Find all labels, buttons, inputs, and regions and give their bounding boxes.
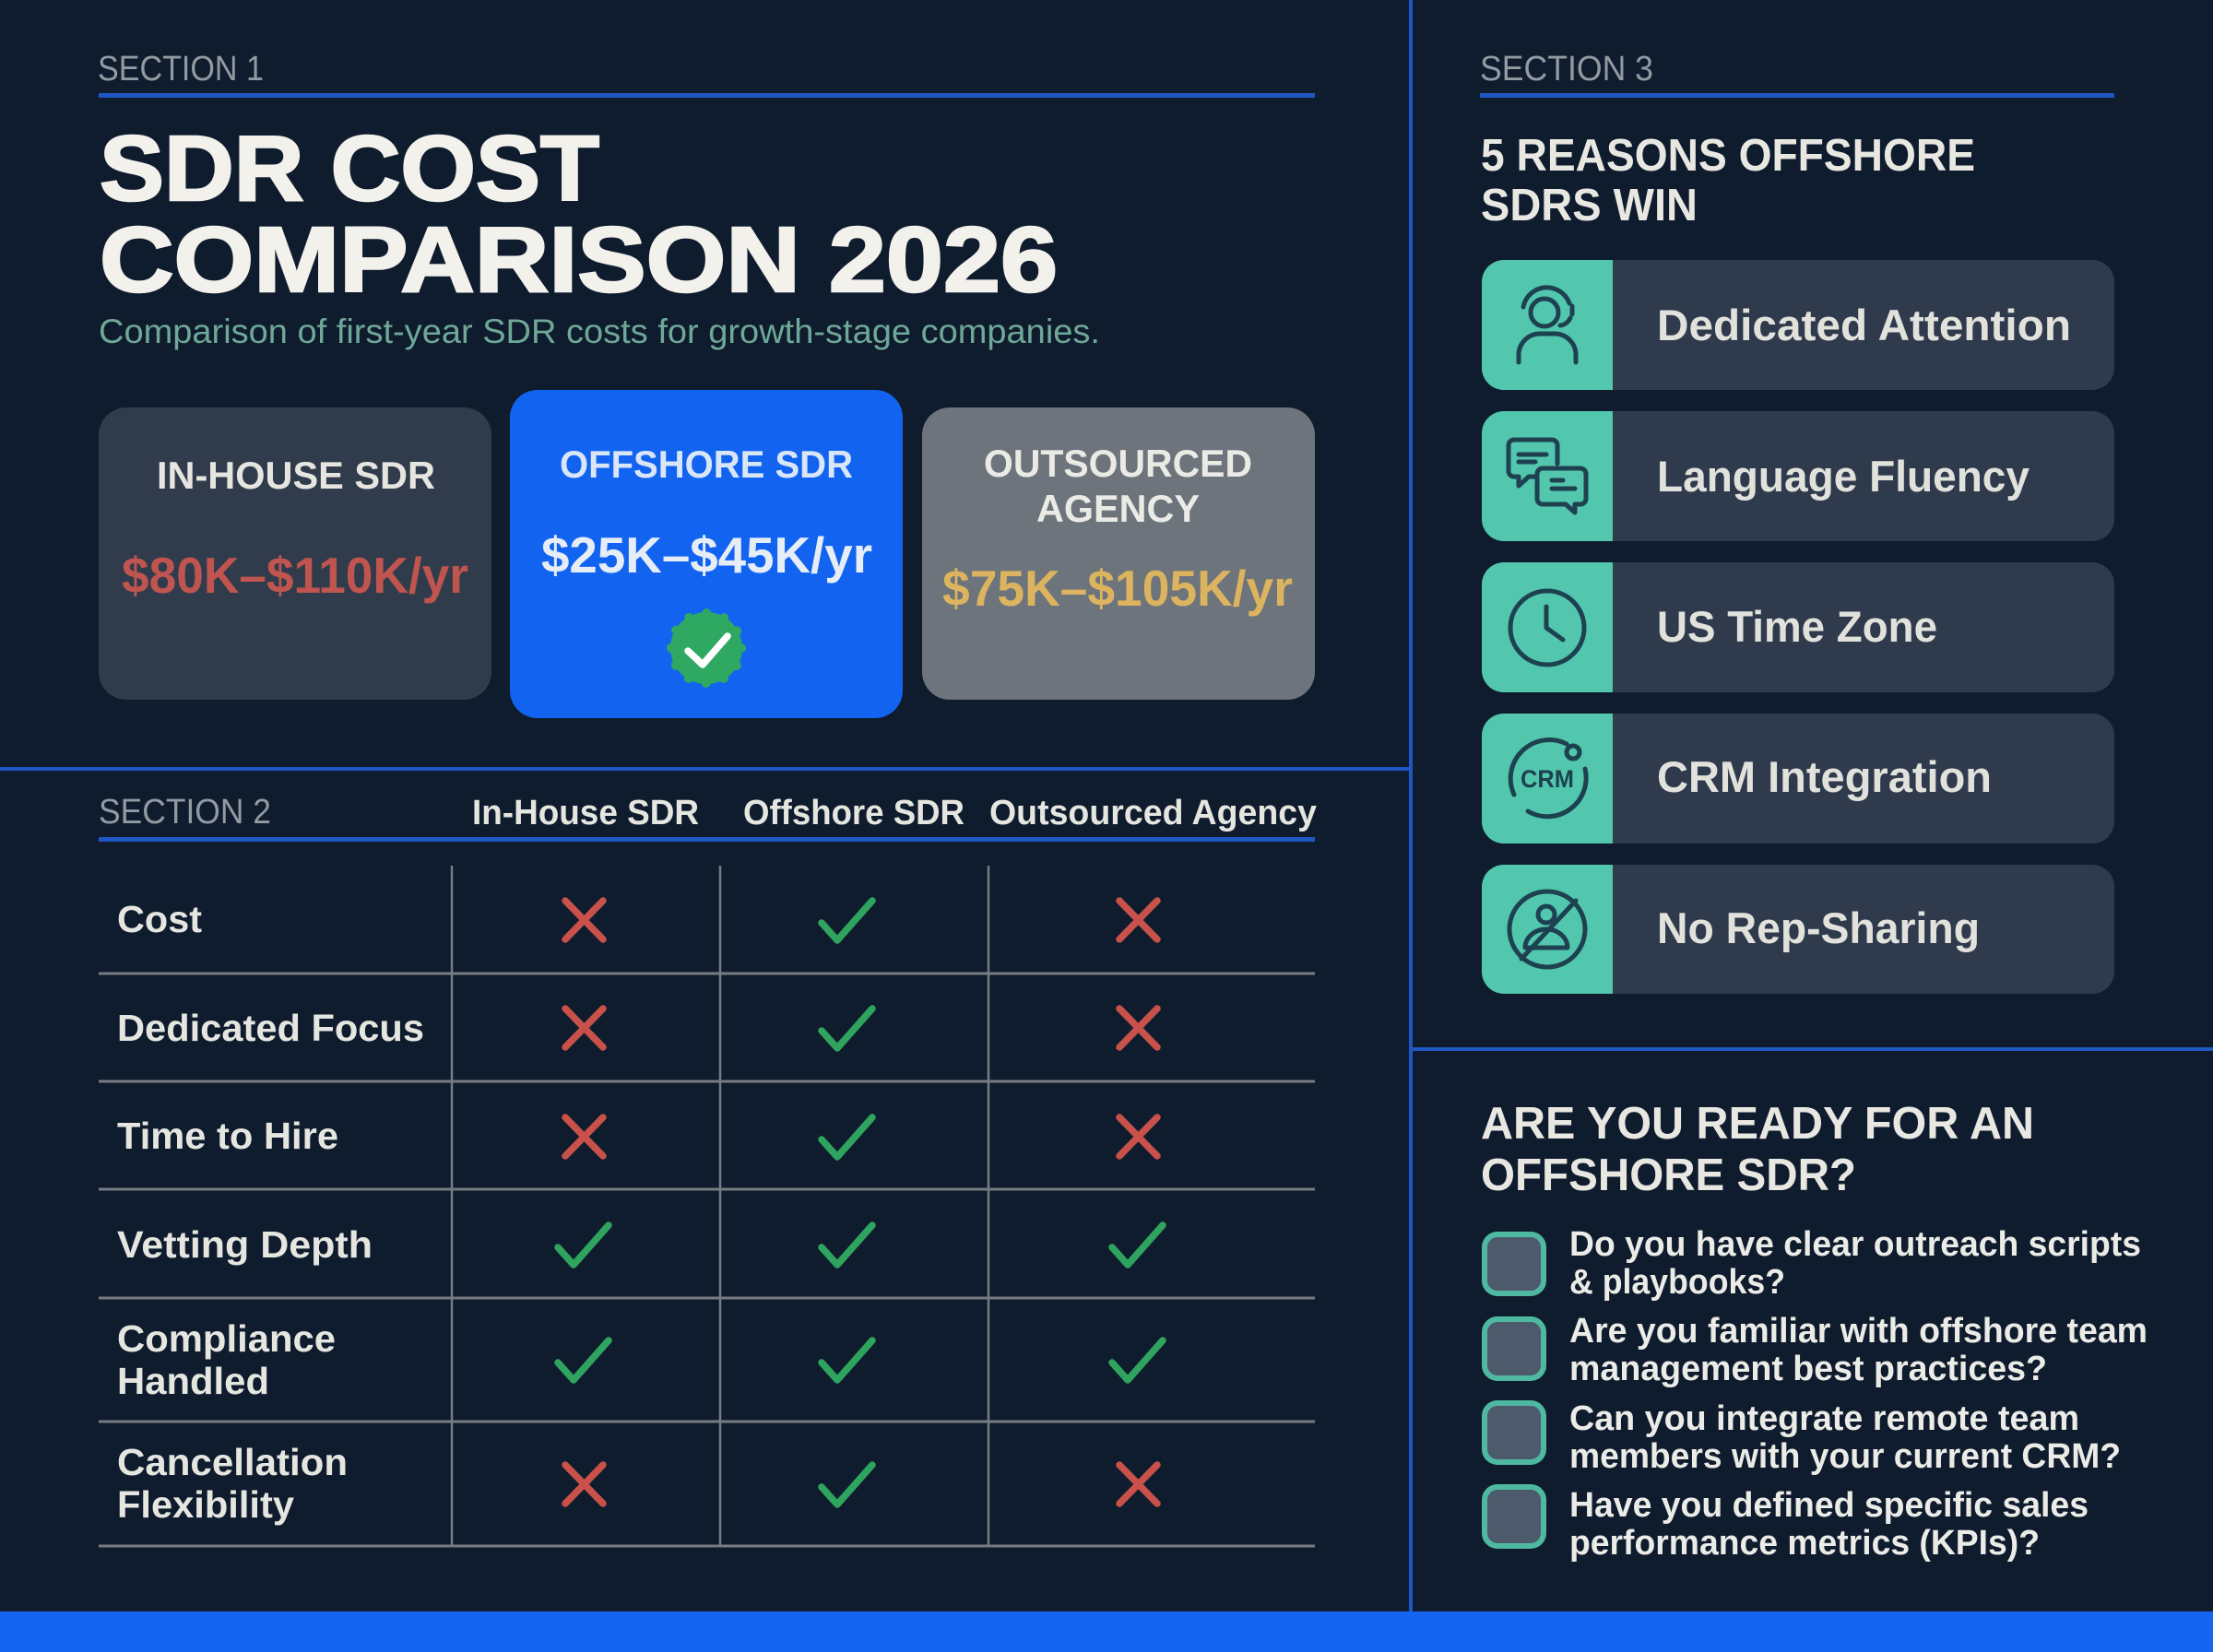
checklist item 1: & playbooks? xyxy=(1569,1263,1785,1302)
card: outsourced agency xyxy=(922,407,1315,700)
icon: CRM ring xyxy=(1510,740,1586,817)
checklist item 2: management best practices? xyxy=(1569,1350,2047,1388)
checklist item 3: Can you integrate remote team xyxy=(1569,1399,2079,1438)
icon: verified badge xyxy=(670,612,742,684)
icon: headset person xyxy=(1519,288,1576,362)
heading: SDRS WIN xyxy=(1481,181,1698,230)
bottom bar xyxy=(0,1611,2213,1652)
checklist item 3: members with your current CRM? xyxy=(1569,1437,2121,1476)
reason: language fluency xyxy=(1482,411,2114,541)
icon: chat bubbles xyxy=(1509,440,1586,513)
panel: section 3 five reasons xyxy=(1480,50,2114,994)
card: outsourced agency: OUTSOURCED xyxy=(984,442,1252,485)
reason: no rep-sharing: No Rep-Sharing xyxy=(1657,903,1980,952)
row labels: Cost xyxy=(117,898,202,940)
icon: no person xyxy=(1509,891,1585,967)
heading: ARE YOU READY FOR AN xyxy=(1481,1099,2034,1149)
row labels xyxy=(117,898,424,1526)
reason: CRM integration xyxy=(1482,714,2114,844)
card: outsourced agency: $75K–$105K/yr xyxy=(942,560,1293,617)
row labels: Cancellation xyxy=(117,1441,348,1483)
table header xyxy=(472,794,1317,832)
title: SDR COST xyxy=(100,117,599,220)
checklist item 2: Are you familiar with offshore team xyxy=(1569,1312,2148,1351)
row labels: Compliance xyxy=(117,1317,336,1360)
card: outsourced agency: AGENCY xyxy=(1036,487,1200,530)
reason: dedicated attention xyxy=(1482,260,2114,390)
panel: section 2 comparison table xyxy=(99,793,1317,1546)
reason: US time zone xyxy=(1482,562,2114,692)
panel: readiness checklist xyxy=(1481,1099,2148,1563)
reason: CRM integration: CRM Integration xyxy=(1657,752,1992,801)
panel: section 1 cost overview xyxy=(98,50,1315,718)
checklist item 3 xyxy=(1485,1399,2121,1476)
card: offshore SDR: $25K–$45K/yr xyxy=(541,526,872,584)
comparison marks xyxy=(558,901,1163,1504)
table header: In-House SDR xyxy=(472,794,699,832)
icon: clock xyxy=(1510,591,1584,665)
heading xyxy=(1481,131,1975,230)
row labels: Handled xyxy=(117,1360,269,1402)
heading: OFFSHORE SDR? xyxy=(1481,1150,1856,1200)
checklist item 2 xyxy=(1485,1312,2148,1388)
card: in-house SDR xyxy=(99,407,491,700)
reason: no rep-sharing xyxy=(1482,865,2114,994)
reason: dedicated attention: Dedicated Attention xyxy=(1657,301,2071,349)
heading xyxy=(1481,1099,2034,1200)
checklist item 1 xyxy=(1485,1225,2141,1302)
checklist item 1: Do you have clear outreach scripts xyxy=(1569,1225,2141,1264)
row labels: Vetting Depth xyxy=(117,1223,373,1266)
subtitle: Comparison of first-year SDR costs for growth-stage companies. xyxy=(99,313,1100,350)
heading: 5 REASONS OFFSHORE xyxy=(1481,131,1975,181)
row labels: Time to Hire xyxy=(117,1115,338,1157)
checklist item 4: Have you defined specific sales xyxy=(1569,1486,2089,1525)
checklist item 4 xyxy=(1485,1486,2089,1563)
title: COMPARISON 2026 xyxy=(100,208,1058,312)
card: in-house SDR: $80K–$110K/yr xyxy=(122,547,468,604)
table header: Offshore SDR xyxy=(743,794,964,832)
table header: Outsourced Agency xyxy=(989,794,1317,832)
section 1 label: SECTION 1 xyxy=(98,50,264,88)
card: offshore SDR: OFFSHORE SDR xyxy=(560,442,853,486)
card: in-house SDR: IN-HOUSE SDR xyxy=(157,454,435,497)
checklist item 4: performance metrics (KPIs)? xyxy=(1569,1524,2040,1563)
icon: CRM ring: CRM xyxy=(1521,765,1574,793)
section 3 label: SECTION 3 xyxy=(1480,50,1653,88)
card: offshore SDR xyxy=(510,390,903,718)
section 2 label: SECTION 2 xyxy=(99,793,271,832)
reason: language fluency: Language Fluency xyxy=(1657,452,2030,501)
row labels: Dedicated Focus xyxy=(117,1007,424,1049)
row labels: Flexibility xyxy=(117,1483,294,1526)
reason: US time zone: US Time Zone xyxy=(1657,602,1937,651)
title xyxy=(100,117,1058,312)
